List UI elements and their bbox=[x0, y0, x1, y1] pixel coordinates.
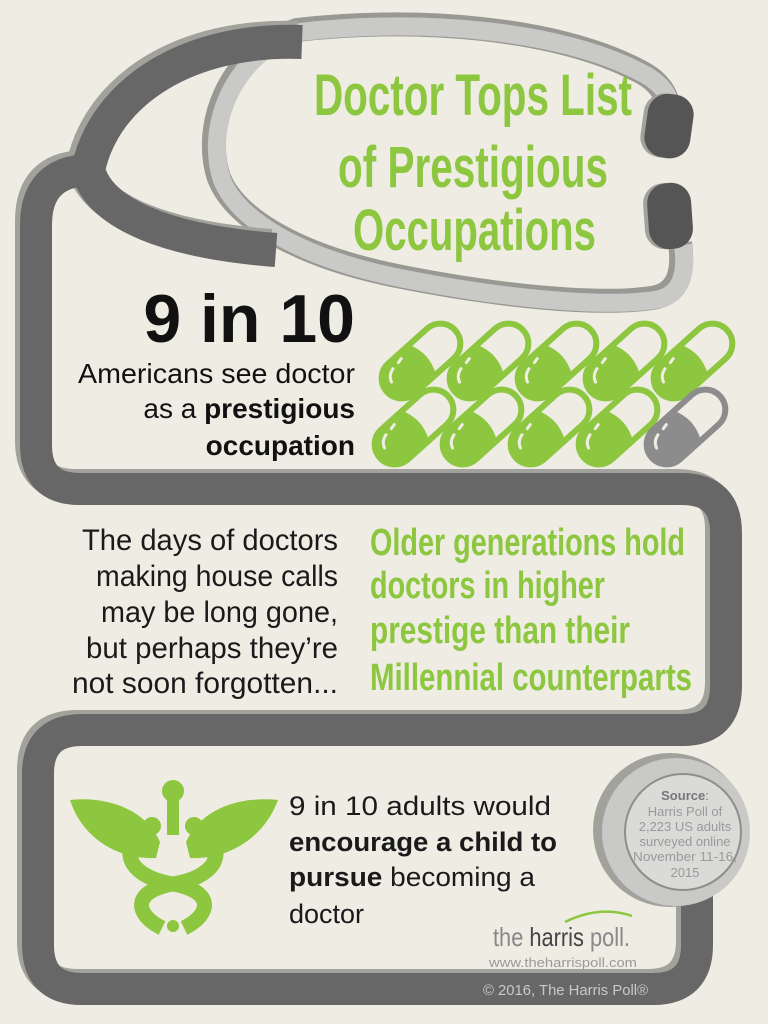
text: encourage a child: pursue becoming a bbox=[289, 862, 536, 892]
stat: 9 in 10 Americans: Americans see doctor bbox=[78, 358, 355, 389]
text: encourage a child: 9 in 10 adults would bbox=[289, 791, 551, 821]
stat: 9 in 10 Americans: as a prestigious bbox=[143, 393, 355, 424]
stethoscope yoke bbox=[214, 24, 684, 303]
icon: caduceus bbox=[70, 780, 278, 932]
stat: 9 in 10 Americans bbox=[78, 281, 355, 461]
source badge: 2,223 US adults bbox=[639, 819, 732, 834]
text: older generations bbox=[370, 522, 692, 699]
text: house calls: not soon forgotten... bbox=[72, 667, 338, 700]
source badge: surveyed online bbox=[639, 834, 731, 849]
source badge: Harris Poll of bbox=[648, 804, 723, 819]
text: house calls bbox=[72, 524, 338, 700]
copyright: © 2016, The Harris Poll® bbox=[483, 982, 648, 999]
logo: the harris poll bbox=[488, 912, 637, 970]
source badge: Source: bbox=[661, 788, 709, 803]
text: house calls: making house calls bbox=[96, 560, 338, 593]
logo: the harris poll: www.theharrispoll.com bbox=[488, 955, 637, 970]
stat: 9 in 10 Americans: occupation bbox=[206, 430, 355, 461]
text: older generations: prestige than their bbox=[370, 610, 630, 652]
text: older generations: doctors in higher bbox=[370, 565, 605, 607]
stat: 9 in 10 Americans: 9 in 10 bbox=[143, 281, 355, 357]
title: Doctor Tops List bbox=[314, 63, 632, 128]
source badge: 2015 bbox=[671, 865, 699, 880]
title: of Prestigious bbox=[338, 135, 608, 200]
source badge: November 11-16, bbox=[633, 849, 737, 864]
text: encourage a child: doctor bbox=[289, 899, 364, 929]
title: Occupations bbox=[353, 198, 596, 263]
text: encourage a child: encourage a child to bbox=[289, 827, 557, 857]
title bbox=[314, 63, 632, 263]
source badge bbox=[593, 753, 750, 907]
logo: the harris poll: the harris poll. bbox=[493, 922, 630, 952]
text: house calls: The days of doctors bbox=[82, 524, 338, 557]
icon: earpieces bbox=[638, 91, 696, 251]
text: house calls: may be long gone, bbox=[101, 596, 338, 629]
text: encourage a child bbox=[289, 791, 557, 929]
pill chart: 9 of 10 bbox=[366, 315, 741, 473]
text: house calls: but perhaps they’re bbox=[86, 632, 338, 665]
